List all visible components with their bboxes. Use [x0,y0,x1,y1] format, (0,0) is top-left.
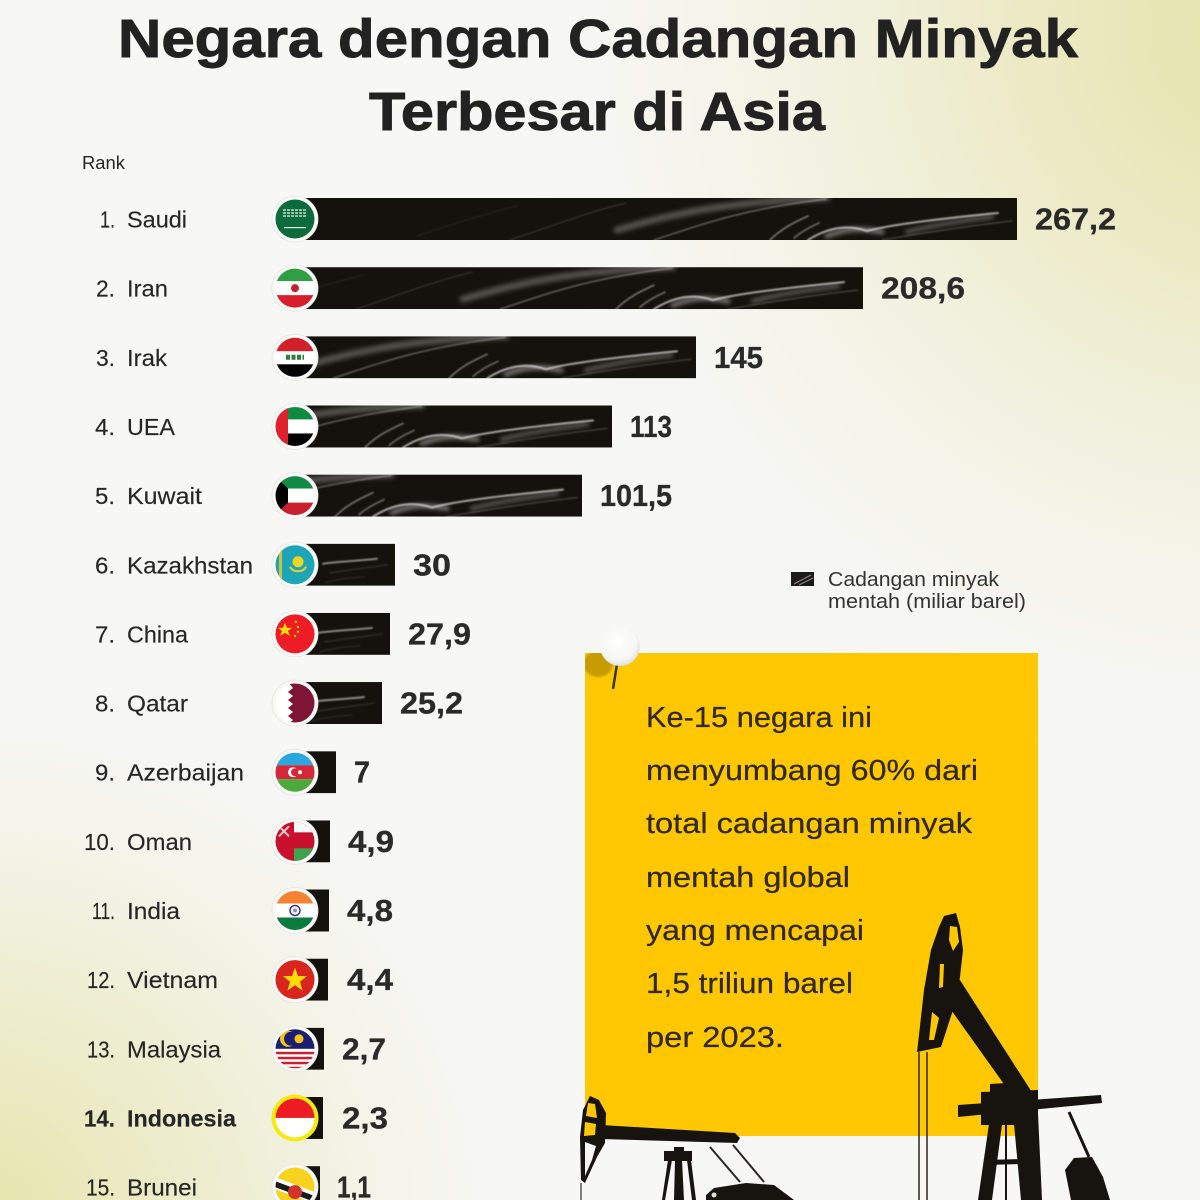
title [118,9,1079,142]
callout text: Ke-15 negara ini [646,702,872,734]
row 7: China: China [127,621,188,647]
row 3: Irak: 145 [714,340,763,375]
callout text: yang mencapai [646,915,864,947]
row 11: India [92,886,393,938]
row 15: Brunei: 15. [86,1175,115,1200]
row 9: Azerbaijan: 9. [95,760,115,786]
row 9: Azerbaijan: 7 [354,755,370,790]
row 12: Vietnam [87,956,394,1006]
row 7: China: 27,9 [408,616,471,651]
row 10: Oman: 10. [84,829,115,855]
row 10: Oman: Oman [127,829,192,855]
row 11: India: 11. [92,898,115,924]
row 8: Qatar [95,679,463,729]
row 9: Azerbaijan: Azerbaijan [127,760,244,786]
row 14: Indonesia: 2,3 [342,1100,388,1135]
callout text: per 2023. [646,1022,784,1054]
row 2: Iran: Iran [127,276,168,302]
row 6: Kazakhstan: Kazakhstan [127,552,253,578]
row 13: Malaysia: Malaysia [127,1036,221,1062]
row 12: Vietnam: 4,4 [347,962,394,997]
rank heading: Rank [82,153,126,173]
row 8: Qatar: 8. [95,691,115,717]
row 14: Indonesia [84,1094,388,1144]
row 8: Qatar: Qatar [127,691,188,717]
legend: mentah (miliar barel) [828,591,1026,613]
pumpjack: right [917,913,1110,1200]
row 15: Brunei [86,1163,371,1200]
row 1: Saudi: 267,2 [1035,202,1116,236]
row 3: Irak: Irak [127,345,168,371]
row 5: Kuwait: 5. [95,483,115,509]
row 5: Kuwait [96,472,672,519]
row 15: Brunei: Brunei [127,1175,197,1200]
row 4: UEA [95,403,672,450]
row 6: Kazakhstan: 30 [413,547,451,582]
title: Negara dengan Cadangan Minyak [118,9,1079,69]
row 1: Saudi: Saudi [127,206,187,232]
row 13: Malaysia: 2,7 [342,1031,386,1066]
legend: Cadangan minyak [828,569,1000,591]
row 3: Irak: 3. [96,345,115,371]
pumpjack: left [580,1096,794,1200]
row 3: Irak [96,333,763,384]
callout text: menyumbang 60% dari [646,755,978,787]
callout text [646,702,978,1054]
row 9: Azerbaijan [95,748,370,799]
row 5: Kuwait: Kuwait [127,483,203,509]
row 7: China: 7. [95,621,115,647]
row 1: Saudi [100,195,1116,245]
row 12: Vietnam: Vietnam [127,967,218,993]
row 4: UEA: 4. [95,414,115,440]
row 2: Iran: 208,6 [881,271,965,306]
callout text: 1,5 triliun barel [646,968,853,1000]
row 12: Vietnam: 12. [87,967,115,993]
row 10: Oman: 4,9 [348,824,394,859]
row 2: Iran: 2. [96,276,115,302]
row 6: Kazakhstan: 6. [95,552,115,578]
icon: push pin [585,636,640,690]
row 4: UEA: UEA [127,414,176,440]
row 14: Indonesia: Indonesia [127,1105,236,1131]
row 6: Kazakhstan [95,541,451,591]
callout text: total cadangan minyak [646,808,973,840]
row 7: China [95,610,471,660]
row 11: India: India [127,898,180,924]
row 2: Iran [96,264,965,315]
row 10: Oman [84,817,394,868]
row 11: India: 4,8 [347,893,393,928]
row 13: Malaysia [87,1025,386,1075]
row 5: Kuwait: 101,5 [600,478,672,513]
row 14: Indonesia: 14. [84,1105,115,1131]
yellow callout panel [585,653,1038,1136]
callout text: mentah global [646,862,850,894]
row 4: UEA: 113 [630,409,672,444]
legend [791,569,1026,613]
title: Terbesar di Asia [369,82,826,142]
row 8: Qatar: 25,2 [400,686,463,721]
row 1: Saudi: 1. [100,206,115,232]
row 13: Malaysia: 13. [87,1036,115,1062]
